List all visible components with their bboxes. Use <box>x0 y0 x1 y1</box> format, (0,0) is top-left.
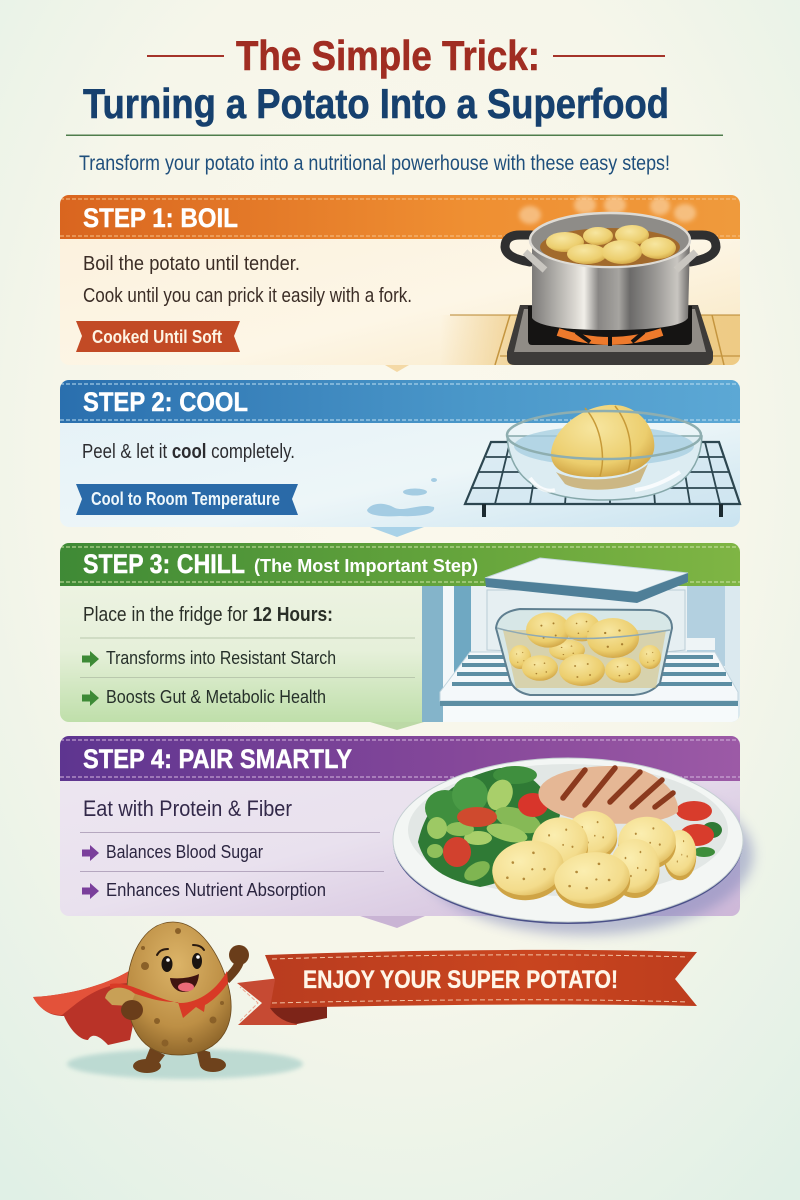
panel: step 3 chill <box>60 543 740 730</box>
scarf and bow <box>110 971 228 1018</box>
right arm <box>226 945 249 980</box>
potato slices <box>664 830 696 880</box>
step 3 text: Place in the fridge for 12 Hours: <box>83 604 333 626</box>
salad <box>418 766 560 887</box>
bullet: boosts gut and metabolic health: Boosts Gut & Metabolic Health <box>106 687 326 707</box>
tag: cool to room temperature: Cool to Room Temperature <box>91 489 280 509</box>
step 2 header: STEP 2: COOL <box>83 387 248 417</box>
wooden counter <box>440 315 740 365</box>
step 2 text: Peel & let it cool completely. <box>82 441 295 463</box>
bullet: enhances nutrient absorption: Enhances Nutrient Absorption <box>106 880 326 900</box>
step 1 header <box>60 195 740 239</box>
illustration: boiling pot on stove <box>505 196 716 365</box>
panel: step 2 cool <box>60 380 740 537</box>
step 3 header <box>60 543 740 586</box>
step 4 text: Eat with Protein & Fiber <box>83 796 292 821</box>
step 4 header: STEP 4: PAIR SMARTLY <box>83 744 352 774</box>
pot handles <box>505 235 716 262</box>
banner: enjoy your super potato <box>237 950 697 1025</box>
subtitle: Transform your potato into a nutritional powerhouse with these easy steps! <box>79 152 670 175</box>
title: The Simple Trick: <box>236 32 540 79</box>
chicken <box>538 766 722 857</box>
step 1 text: Cook until you can prick it easily with a fork. <box>83 285 412 307</box>
face <box>157 945 204 992</box>
illustration: glass bowl on rack <box>465 405 740 517</box>
step 3 header: STEP 3: CHILL <box>83 549 245 579</box>
burner flames <box>558 332 662 346</box>
illustration: plate with salad, chicken and potatoes <box>393 758 753 935</box>
step 1 text: Boil the potato until tender. <box>83 253 300 275</box>
step 1 header: STEP 1: BOIL <box>83 203 238 233</box>
left arm and fist <box>105 988 143 1020</box>
body <box>127 922 231 1055</box>
panel: step 1 boil <box>60 195 740 372</box>
step 2 header <box>60 380 740 423</box>
banner: enjoy your super potato: ENJOY YOUR SUPER POTATO! <box>303 966 618 994</box>
panel: step 4 pair smartly <box>60 736 753 935</box>
legs and feet <box>133 1048 226 1073</box>
tag: cooked until soft: Cooked Until Soft <box>92 327 222 347</box>
step 3 header: (The Most Important Step) <box>254 556 478 576</box>
tag: cooked until soft <box>76 321 240 352</box>
step 4 header <box>60 736 740 781</box>
mascot: super potato <box>33 922 303 1079</box>
water puddle <box>367 478 437 516</box>
title <box>83 32 669 127</box>
tag: cool to room temperature <box>76 484 298 515</box>
cape <box>33 971 138 1045</box>
fridge interior <box>422 586 740 722</box>
bullet: transforms into resistant starch: Transforms into Resistant Starch <box>106 648 336 668</box>
illustration: containers on fridge shelf <box>440 558 738 706</box>
title: Turning a Potato Into a Superfood <box>83 80 669 127</box>
step 1 text <box>83 253 412 307</box>
bullet: balances blood sugar: Balances Blood Sugar <box>106 842 263 862</box>
